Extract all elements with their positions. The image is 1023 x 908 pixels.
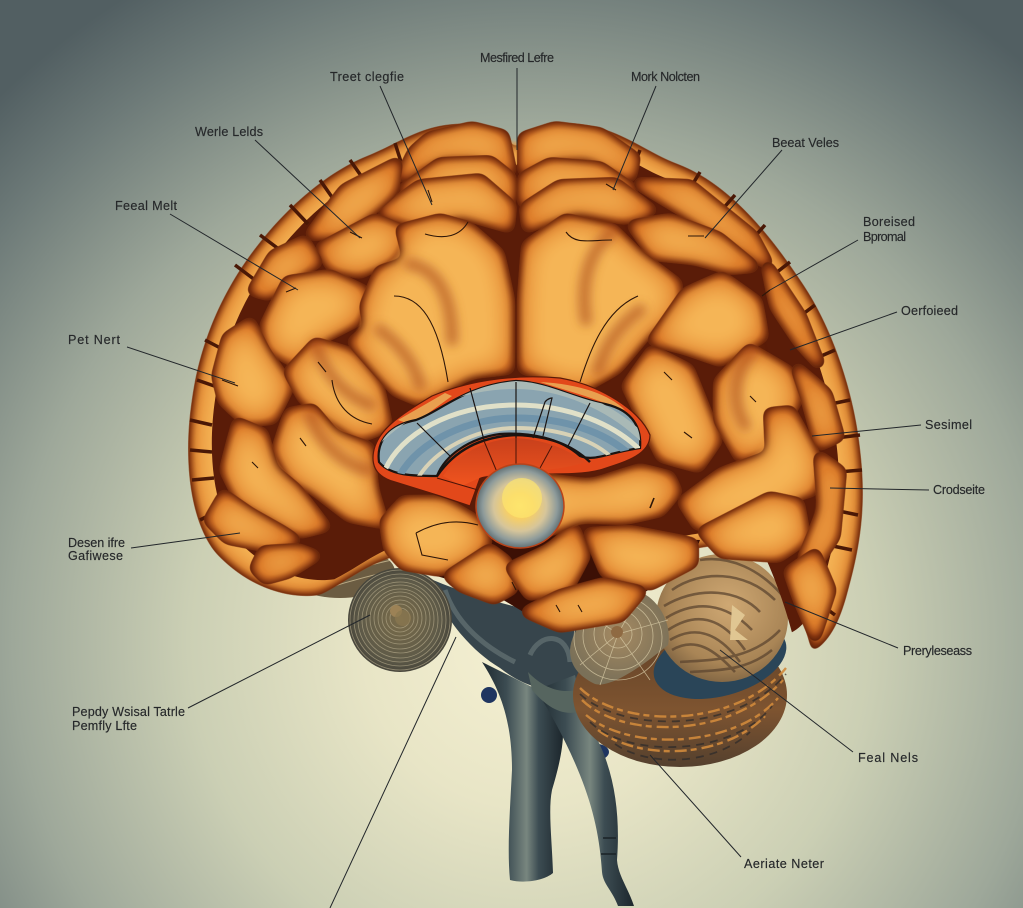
spoke lines over fan bbox=[484, 438, 552, 472]
label: top centre: Mesfired Lefre bbox=[480, 51, 554, 65]
striped tissue under left lobe bbox=[285, 546, 395, 598]
bulb crease bbox=[650, 498, 654, 508]
thin red line under fan bbox=[437, 478, 478, 490]
label: bottom right: Aeriate Neter bbox=[744, 857, 824, 871]
label: right two-line: Bpromal bbox=[863, 230, 906, 244]
brain outer rim bbox=[188, 123, 863, 652]
blue striped window bbox=[379, 381, 640, 476]
brainstem highlight bbox=[445, 590, 570, 662]
orange hatched crescents bbox=[398, 382, 625, 425]
brainstem upper mass bbox=[433, 580, 598, 692]
label: right two-line bbox=[863, 215, 915, 244]
label: left two-line bbox=[68, 536, 125, 563]
dark underlay for lower gyri bbox=[395, 530, 700, 622]
left concentric ball bbox=[348, 568, 452, 672]
gyri: left hemisphere bbox=[210, 128, 512, 598]
label: left two-line: Gafiwese bbox=[68, 549, 123, 563]
soft fold shading on large lobes bbox=[310, 232, 752, 470]
label: top left outer: Werle Lelds bbox=[195, 125, 263, 139]
crease marks on gyri bbox=[222, 184, 770, 612]
pale stripes bbox=[378, 385, 645, 478]
lower structures behind the brain bbox=[285, 546, 795, 906]
label: left: Pet Nert bbox=[68, 333, 120, 347]
label: lower left two-line bbox=[72, 705, 185, 733]
label: top right: Mork Nolcten bbox=[631, 70, 700, 84]
label: upper left: Feeal Melt bbox=[115, 199, 178, 213]
label: right middle: Sesimel bbox=[925, 418, 972, 432]
small blue nubs bbox=[481, 680, 609, 760]
membrane red outer bbox=[373, 377, 650, 506]
dark gap under the gyri bbox=[212, 140, 839, 632]
lower basket structure bbox=[573, 623, 787, 767]
left descending tube bbox=[482, 662, 563, 882]
label: left two-line: Desen ifre bbox=[68, 536, 125, 550]
tube collar marks bbox=[601, 838, 616, 854]
bulb bbox=[476, 464, 564, 548]
gyri: right hemisphere bbox=[512, 128, 840, 635]
label: lower right: Feal Nels bbox=[858, 751, 918, 765]
central membrane bbox=[373, 377, 650, 506]
rim lobe divisions bbox=[190, 143, 862, 615]
label: lower left two-line: Pepdy Wsisal Tatrle bbox=[72, 705, 185, 719]
label: lower left two-line: Pemfly Lfte bbox=[72, 719, 137, 733]
label: right lower: Crodseite bbox=[933, 483, 985, 497]
label: top left: Treet clegfie bbox=[330, 70, 404, 84]
arc and spokes bbox=[437, 435, 590, 476]
netted disc bbox=[570, 592, 669, 685]
label: right: Oerfoieed bbox=[901, 304, 958, 318]
stem cross-band bbox=[528, 672, 582, 713]
right descending tube bbox=[536, 675, 634, 906]
blue rim bbox=[645, 608, 795, 712]
label: right two-line: Boreised bbox=[863, 215, 915, 229]
leader lines bbox=[127, 68, 929, 908]
bulb tail bbox=[515, 466, 680, 536]
label: cerebellum: Preryleseass bbox=[903, 644, 972, 658]
red fan bbox=[443, 438, 585, 486]
label: upper right: Beeat Veles bbox=[772, 136, 839, 150]
tan striped cerebellum bbox=[656, 554, 788, 682]
